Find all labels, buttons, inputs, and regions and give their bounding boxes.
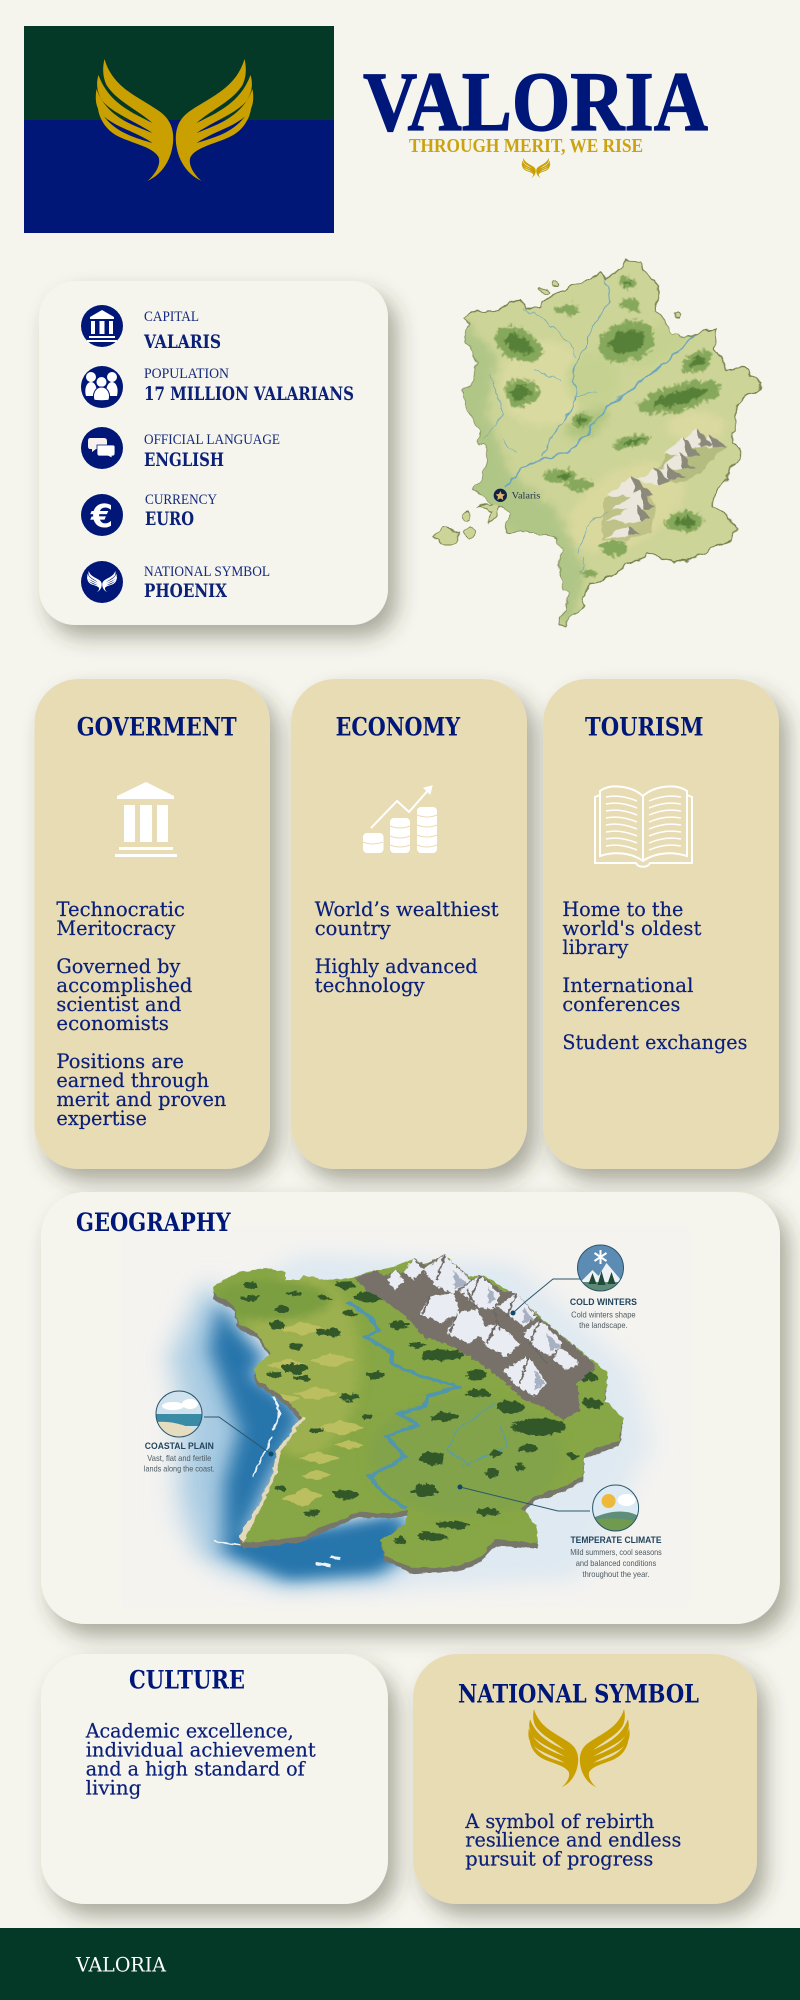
sea: [171, 1253, 650, 1590]
text block: Highly advanced: [315, 955, 478, 978]
flag: [24, 26, 334, 233]
text block: scientist and: [56, 993, 181, 1016]
rivers: [483, 280, 693, 573]
text block: expertise: [56, 1107, 147, 1130]
callout: coastal plain: Vast, flat and fertile: [147, 1453, 212, 1463]
illustrated relief map: [156, 1251, 654, 1600]
icon: phoenix wings: [528, 1709, 630, 1787]
callout: temperate climate: [570, 1485, 662, 1579]
text block: country: [315, 917, 392, 940]
text block: [315, 898, 499, 997]
text block: Meritocracy: [56, 917, 176, 940]
text block: International: [562, 974, 693, 997]
text block: Academic excellence,: [85, 1720, 294, 1743]
callout: cold winters: [570, 1245, 637, 1330]
symbol text: NATIONAL SYMBOL: [144, 564, 270, 580]
footer: [0, 1928, 800, 2000]
text block: technology: [315, 974, 426, 997]
text block: Home to the: [562, 898, 683, 921]
callout leaders: [204, 1279, 590, 1511]
panel: government: [34, 679, 270, 1169]
text block: and a high standard of: [86, 1758, 306, 1781]
text block: [85, 1720, 316, 1800]
text block: World’s wealthiest: [315, 898, 499, 921]
callout: cold winters: Cold winters shape: [571, 1310, 636, 1320]
symbol text: [144, 564, 270, 602]
icon: coins and rising arrow: [363, 786, 437, 853]
icon: open book: [595, 786, 692, 867]
callout: temperate climate: TEMPERATE CLIMATE: [570, 1535, 662, 1546]
title: VALORIA: [363, 55, 708, 149]
symbol text: PHOENIX: [144, 580, 227, 602]
heading: ECONOMY: [336, 713, 461, 742]
city marker: [494, 489, 541, 502]
text block: [464, 1810, 681, 1871]
city marker: Valaris: [512, 490, 541, 500]
fields: [263, 1322, 364, 1506]
text block: library: [562, 936, 629, 959]
text block: economists: [56, 1012, 169, 1035]
callout: cold winters: COLD WINTERS: [570, 1297, 637, 1308]
foam: [214, 1397, 340, 1566]
heading: CULTURE: [129, 1666, 245, 1695]
capital text: CAPITAL: [144, 309, 199, 325]
icon: columned building: [115, 782, 177, 857]
capital text: VALARIS: [143, 331, 221, 353]
text block: [56, 898, 227, 1130]
heading: GEOGRAPHY: [76, 1208, 232, 1237]
text block: living: [86, 1777, 141, 1800]
text block: merit and proven: [56, 1088, 227, 1111]
currency text: [145, 492, 217, 530]
callout: temperate climate: throughout the year.: [582, 1569, 650, 1579]
callout: temperate climate: and balanced conditions: [576, 1558, 656, 1568]
text block: Technocratic: [56, 898, 185, 921]
panel: tourism: [543, 679, 779, 1169]
text block: conferences: [562, 993, 680, 1016]
panel: economy: [291, 679, 527, 1169]
forests: [488, 277, 724, 577]
text block: world's oldest: [562, 917, 702, 940]
icon: capital: [81, 305, 123, 347]
icon: population: [81, 366, 123, 408]
map: Valoria island: [433, 261, 762, 627]
callout: coastal plain: COASTAL PLAIN: [145, 1441, 214, 1452]
text block: earned through: [56, 1069, 209, 1092]
population text: 17 MILLION VALARIANS: [144, 383, 354, 405]
callout: temperate climate: Mild summers, cool seasons: [570, 1547, 662, 1557]
text block: pursuit of progress: [465, 1848, 653, 1871]
callout: cold winters: the landscape.: [579, 1320, 628, 1330]
language text: [144, 432, 280, 471]
callout: coastal plain: [144, 1391, 215, 1474]
text block: [562, 898, 747, 1054]
land: [213, 1255, 624, 1574]
text block: Student exchanges: [562, 1031, 747, 1054]
panel: national symbol: [413, 1654, 757, 1904]
panel: key facts: [39, 281, 388, 625]
tagline: THROUGH MERIT, WE RISE: [409, 135, 643, 157]
text block: accomplished: [56, 974, 192, 997]
text block: Positions are: [56, 1050, 184, 1073]
icon: language: [81, 427, 123, 469]
population text: POPULATION: [144, 366, 229, 382]
currency text: CURRENCY: [145, 492, 217, 508]
trees: [241, 1281, 603, 1544]
text block: A symbol of rebirth: [464, 1810, 655, 1833]
population text: [144, 366, 354, 405]
panel: geography: [41, 1192, 780, 1624]
text block: individual achievement: [86, 1739, 316, 1762]
heading: GOVERMENT: [77, 713, 237, 742]
currency text: EURO: [145, 508, 194, 530]
icon: symbol: [81, 561, 123, 603]
callout: coastal plain: lands along the coast.: [144, 1464, 215, 1474]
icon: euro: [81, 494, 123, 536]
icon: flag phoenix wings: [96, 59, 253, 181]
icon: small wings: [522, 158, 550, 178]
footer: VALORIA: [75, 1954, 167, 1977]
text block: Governed by: [56, 955, 181, 978]
icon: euro: €: [90, 497, 113, 535]
text block: resilience and endless: [465, 1829, 681, 1852]
heading: NATIONAL SYMBOL: [458, 1680, 699, 1709]
capital text: [143, 309, 221, 353]
river: [347, 1302, 459, 1508]
language text: ENGLISH: [144, 449, 224, 471]
panel: culture: [41, 1654, 388, 1904]
mountains: [600, 428, 727, 540]
heading: TOURISM: [585, 713, 704, 742]
mountains: [355, 1255, 597, 1420]
language text: OFFICIAL LANGUAGE: [144, 432, 280, 448]
